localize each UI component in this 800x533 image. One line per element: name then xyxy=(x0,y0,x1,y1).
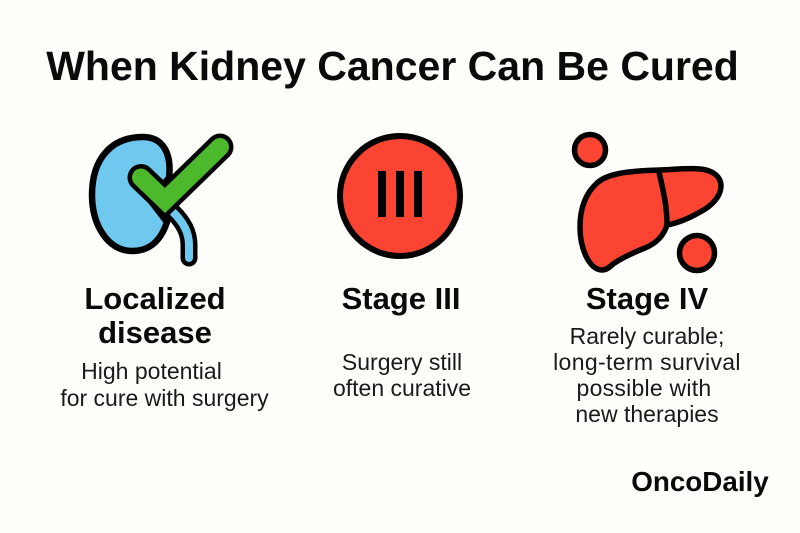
text: localized disease description: for cure with surgery xyxy=(60,384,269,410)
kidney xyxy=(92,137,170,251)
text: stage III description: Surgery still xyxy=(342,349,462,375)
heading: stage IV: Stage IV xyxy=(586,281,708,316)
heading: localized disease: disease xyxy=(98,315,212,350)
heading: localized disease xyxy=(84,281,226,350)
text: stage III description: often curative xyxy=(333,375,471,401)
heading: localized disease: Localized xyxy=(84,281,226,316)
ureter xyxy=(173,212,189,258)
text: stage IV description: possible with xyxy=(577,375,711,401)
brand logo text: OncoDaily xyxy=(631,466,769,497)
text: stage III description xyxy=(333,349,471,401)
text: stage IV description: new therapies xyxy=(575,401,719,427)
title: When Kidney Cancer Can Be Cured xyxy=(46,43,739,89)
text: stage IV description: Rarely curable; xyxy=(570,323,724,349)
text: stage IV description xyxy=(553,323,741,427)
heading: stage III: Stage III xyxy=(342,281,460,316)
icon: liver with metastases xyxy=(574,134,721,270)
text: localized disease description xyxy=(60,358,269,411)
icon: stage III circle xyxy=(340,136,460,256)
text: stage IV description: long-term survival xyxy=(553,349,741,375)
text: localized disease description: High potential xyxy=(81,358,222,384)
check mark xyxy=(141,147,220,200)
